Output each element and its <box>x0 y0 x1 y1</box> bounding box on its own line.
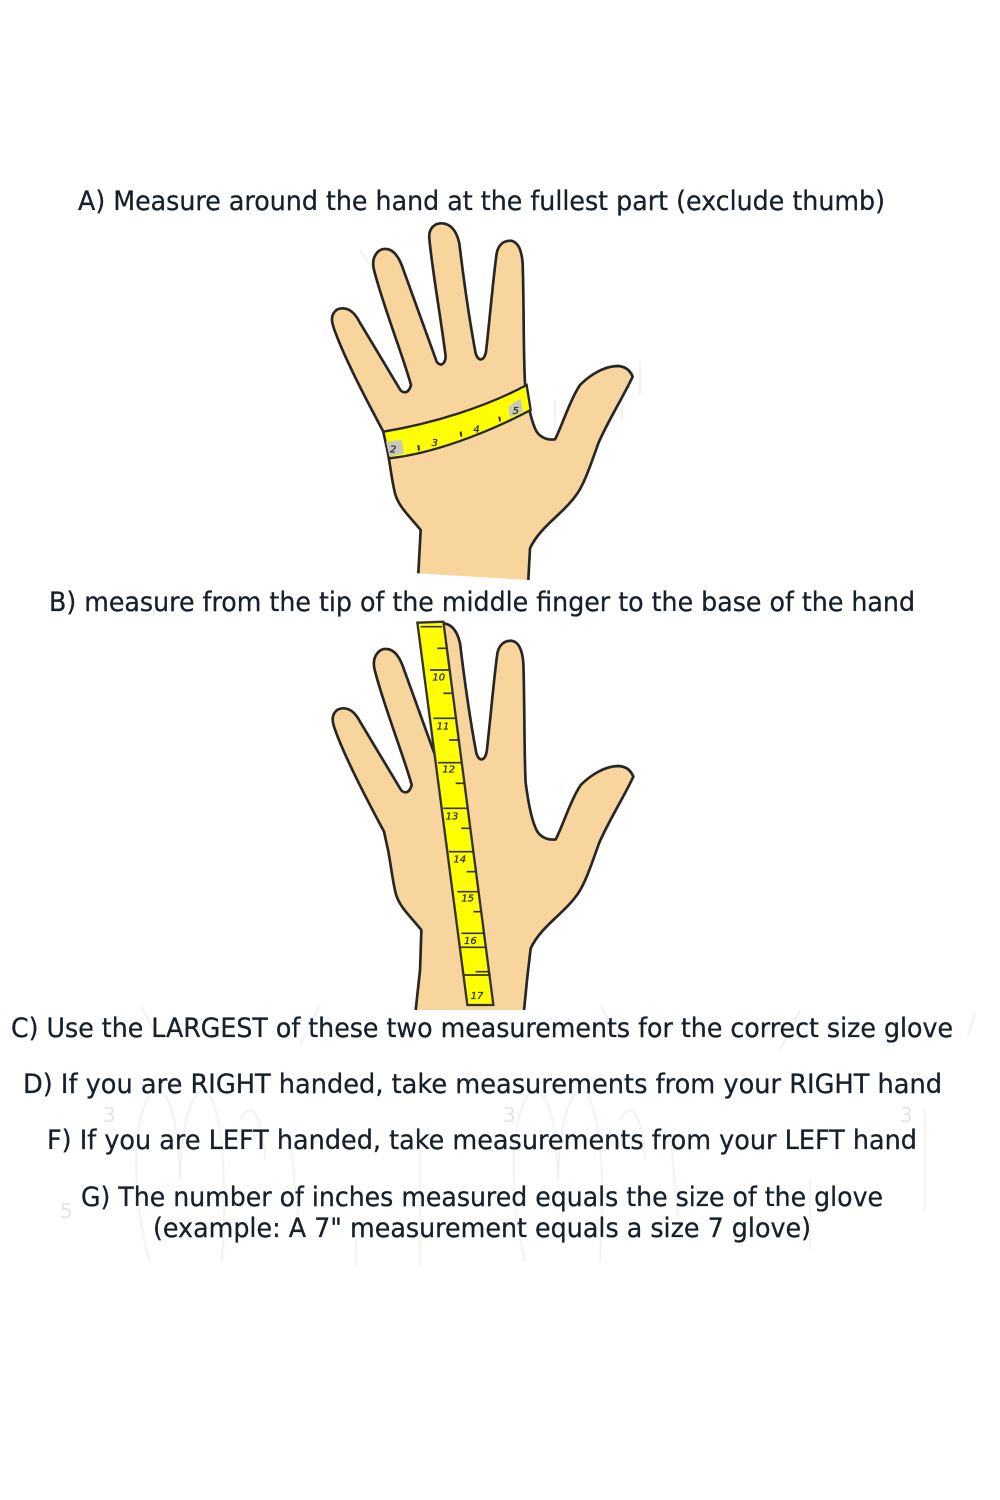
tape measure A: 3 <box>432 438 438 449</box>
instruction D: D) If you are RIGHT handed, take measurements from your RIGHT hand <box>23 1069 942 1100</box>
hand illustration A with tape around palm <box>332 223 633 580</box>
faint background ghost numerals: 3 <box>503 1103 516 1127</box>
instruction G: (example: A 7" measurement equals a size 7 glove) <box>153 1213 811 1244</box>
hand A outline <box>332 223 633 580</box>
tape measure B: 17 <box>471 991 484 1002</box>
faint background ghost numerals: 3 <box>900 1103 913 1127</box>
faint background ghost numerals <box>60 1103 913 1223</box>
tape measure B: 10 <box>432 673 445 684</box>
instruction F: F) If you are LEFT handed, take measurements from your LEFT hand <box>47 1125 917 1156</box>
tape measure A <box>383 385 531 458</box>
tape measure A: 2 <box>390 445 396 456</box>
tape measure B: 15 <box>461 894 474 905</box>
tape measure B: 13 <box>446 811 458 822</box>
tape measure A: 5 <box>513 406 519 417</box>
hand illustration B with tape along length <box>333 622 633 1010</box>
tape measure B: 16 <box>464 936 477 947</box>
instruction G: G) The number of inches measured equals the size of the glove <box>81 1182 883 1213</box>
tape measure B: 11 <box>437 721 449 732</box>
tape measure B <box>417 622 493 1005</box>
instruction A heading: A) Measure around the hand at the fullest part (exclude thumb) <box>78 186 885 217</box>
hand B outline <box>333 623 633 1010</box>
instruction B heading: B) measure from the tip of the middle finger to the base of the hand <box>49 587 915 618</box>
tape measure A: 4 <box>473 425 480 436</box>
faint background ghost numerals: 5 <box>60 1199 73 1223</box>
tape measure B: 14 <box>453 854 466 865</box>
faint background ghost marks <box>136 250 975 1265</box>
tape measure B: 12 <box>442 764 455 775</box>
faint background ghost numerals: 3 <box>103 1103 116 1127</box>
instruction G <box>81 1182 883 1244</box>
instruction C: C) Use the LARGEST of these two measurements for the correct size glove <box>11 1013 953 1044</box>
